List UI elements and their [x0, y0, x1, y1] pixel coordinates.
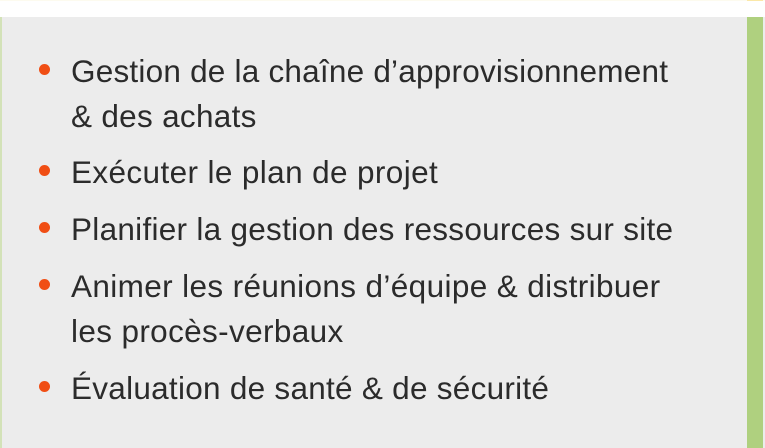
text: Exécuter le plan de projet: Exécuter le plan de projet [71, 154, 438, 190]
bullet 3 [39, 222, 50, 233]
top yellow tab [747, 0, 763, 1]
text: Animer les réunions d’équipe & distribuer les procès-verbaux: Animer les réunions d’équipe & distribuer [71, 268, 660, 304]
text: Évaluation de santé & de sécurité: Évaluation de santé & de sécurité [71, 370, 549, 406]
bullet 4 [39, 279, 50, 290]
bullet 2 [39, 165, 50, 176]
text: Animer les réunions d’équipe & distribuer les procès-verbaux: les procès-verbaux [71, 313, 344, 349]
text: Planifier la gestion des ressources sur site: Planifier la gestion des ressources sur site [71, 211, 673, 247]
text: Gestion de la chaîne d’approvisionnement & des achats: & des achats [71, 98, 257, 134]
right green bar [747, 17, 763, 448]
bullet 5 [39, 381, 50, 392]
top yellow trim [0, 0, 765, 1]
text: Gestion de la chaîne d’approvisionnement & des achats: Gestion de la chaîne d’approvisionnement [71, 53, 668, 89]
bullet 1 [39, 64, 50, 75]
left green edge [0, 17, 2, 448]
text: Animer les réunions d’équipe & distribuer les procès-verbaux [71, 268, 660, 349]
text: Gestion de la chaîne d’approvisionnement & des achats [71, 53, 668, 134]
